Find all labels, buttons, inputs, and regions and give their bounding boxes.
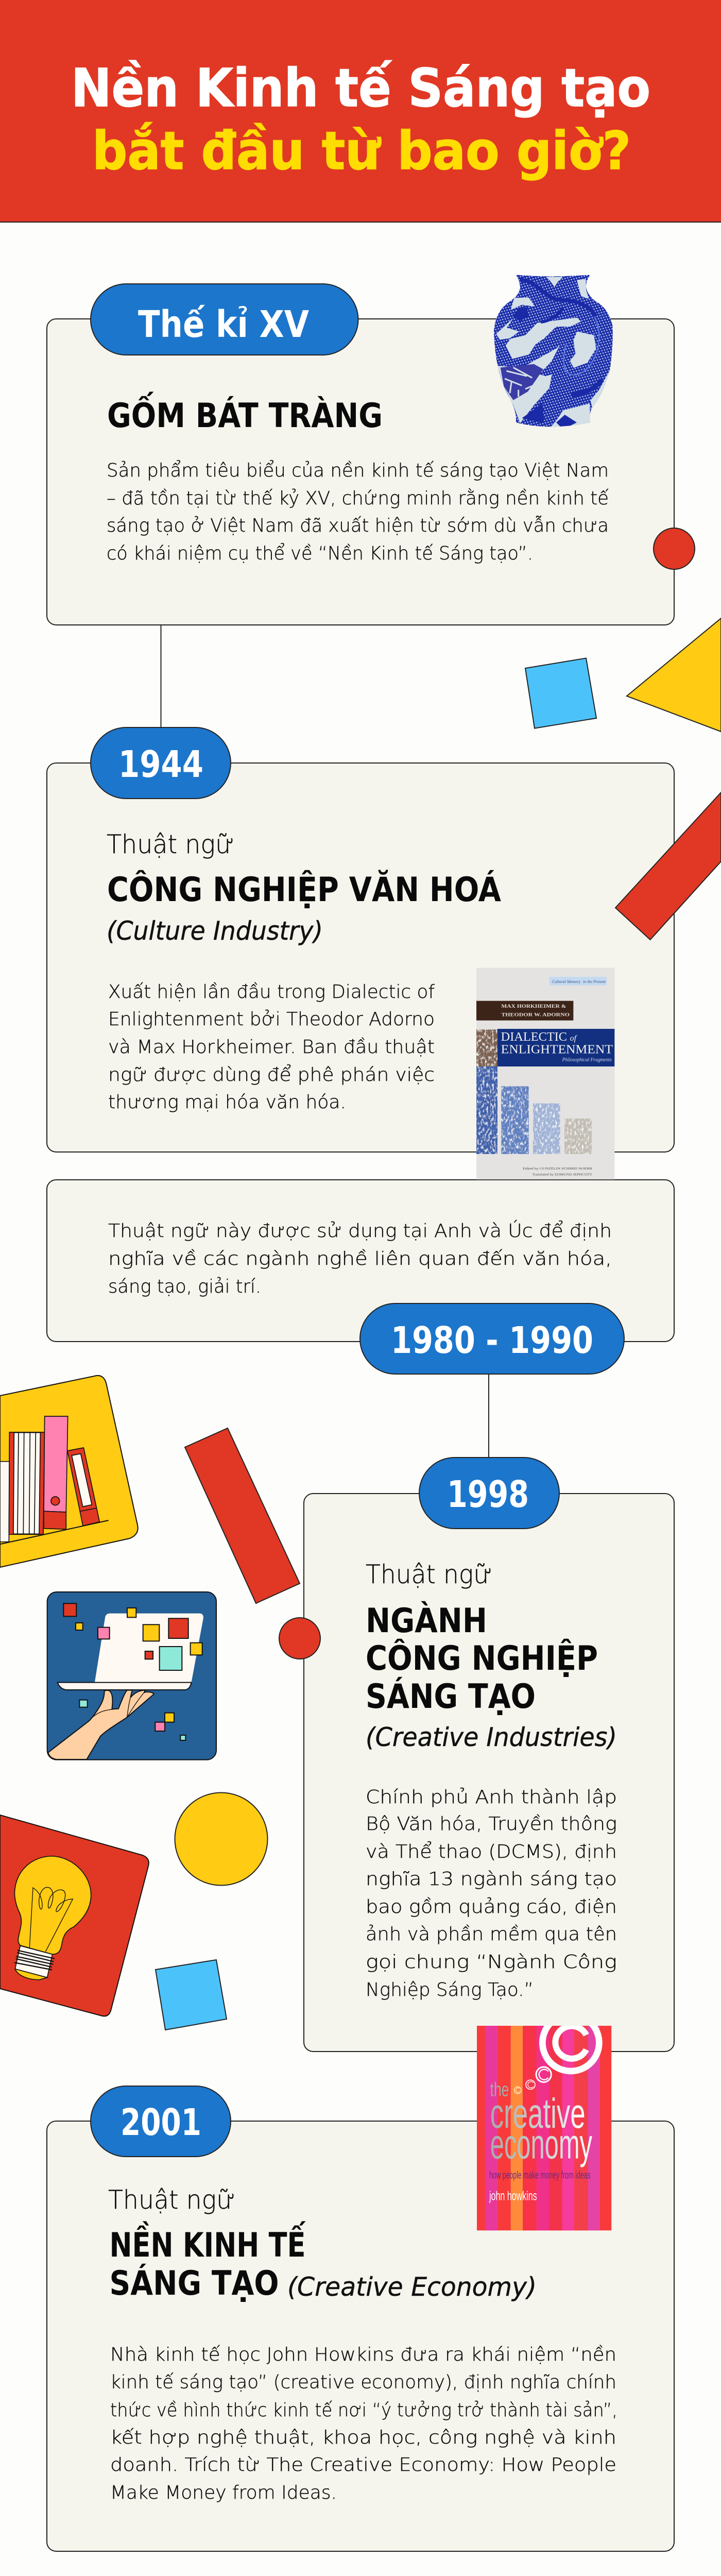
label: Thuật ngữ: Thuật ngữ: [366, 1560, 492, 1589]
date pill: Thế kỉ XV: Thế kỉ XV: [138, 303, 309, 346]
book cover: Dialectic of Enlightenment: in the Present: [583, 979, 606, 984]
book cover: The Creative Economy: how people make money from ideas: [489, 2169, 591, 2181]
body text: Creative Economy: thức về hình thức kinh tế nơi “ý tưởng trở thành tài sản”,: [110, 2400, 617, 2421]
body text: Culture Industry: thương mại hóa văn hóa.: [108, 1092, 346, 1113]
body text: Culture Industry: Enlightenment bởi Theodor Adorno: [108, 1009, 435, 1030]
book cover: The Creative Economy: creative: [490, 2090, 586, 2137]
book cover: Dialectic of Enlightenment: Philosophical Fragments: [562, 1057, 612, 1063]
body text: Gốm Bát Tràng: [107, 460, 609, 564]
illustration: red card with light bulb: [0, 1815, 149, 2016]
body text: Creative Industries: Bộ Văn hóa, Truyền thông: [366, 1814, 617, 1835]
heading: CÔNG NGHIỆP VĂN HOÁ: CÔNG NGHIỆP VĂN HOÁ: [107, 869, 501, 909]
illustration: yellow card with books: [0, 1376, 138, 1567]
body text: Gốm Bát Tràng: sáng tạo ở Việt Nam đã xuất hiện từ sớm dù vẫn chưa: [107, 515, 609, 536]
book cover: Dialectic of Enlightenment: [476, 968, 614, 1179]
book cover: Dialectic of Enlightenment: DIALECTIC: [501, 1030, 567, 1044]
date pill: 1980 - 1990: [360, 1303, 624, 1374]
body text: Gốm Bát Tràng: – đã tồn tại từ thế kỷ XV, chứng minh rằng nền kinh tế: [107, 488, 609, 509]
title line 2: bắt đầu từ bao giờ?: [92, 121, 631, 182]
body text: Culture Industry: Xuất hiện lần đầu trong Dialectic of: [108, 981, 435, 1003]
body text: Anh và Úc: sáng tạo, giải trí.: [108, 1276, 261, 1297]
body text: Creative Economy: [110, 2344, 617, 2503]
panel: 1998 Creative Industries: [304, 1458, 674, 2052]
body text: Anh và Úc: Thuật ngữ này được sử dụng tại Anh và Úc để định: [108, 1220, 612, 1242]
body text: Creative Industries: gọi chung “Ngành Công: [366, 1952, 617, 1973]
body text: Gốm Bát Tràng: Sản phẩm tiêu biểu của nền kinh tế sáng tạo Việt Nam: [107, 460, 609, 481]
body text: Creative Industries: nghĩa 13 ngành sáng tạo: [366, 1869, 617, 1890]
book cover: Dialectic of Enlightenment: ENLIGHTENMENT: [501, 1043, 613, 1057]
heading: NGÀNH CÔNG NGHIỆP SÁNG TẠO: [366, 1600, 598, 1716]
body text: Creative Industries: Nghiệp Sáng Tạo.”: [366, 1979, 534, 2001]
book cover: The Creative Economy: the: [490, 2078, 509, 2100]
body text: Anh và Úc: nghĩa về các ngành nghề liên quan đến văn hóa,: [108, 1248, 612, 1269]
decoration: yellow circle: [175, 1793, 268, 1886]
subheading: Culture Industry: (Culture Industry): [107, 916, 323, 946]
heading: GỐM BÁT TRÀNG: GỐM BÁT TRÀNG: [107, 391, 383, 435]
title line 1: Nền Kinh tế Sáng tạo: [71, 58, 650, 119]
body text: Creative Economy: Nhà kinh tế học John Howkins đưa ra khái niệm “nền: [110, 2344, 616, 2365]
book cover: Dialectic of Enlightenment: Translated by EDMUND JEPHCOTT: [532, 1173, 592, 1176]
book cover: The Creative Economy: [477, 2014, 611, 2230]
timeline connector: 1980-1990 to 1998: [488, 1374, 489, 1458]
illustration: hand holding laptop: [47, 1592, 216, 1760]
label: Thuật ngữ: Thuật ngữ: [108, 2185, 235, 2215]
date pill: 2001: [91, 2086, 231, 2157]
panel: 2001 Creative Economy: [47, 2086, 674, 2551]
decoration: yellow triangle: [627, 618, 721, 732]
body text: Creative Industries: ảnh và phần mềm qua tên: [366, 1924, 617, 1945]
decoration: red tilted rectangle: [185, 1428, 300, 1603]
book cover: The Creative Economy: economy: [490, 2121, 592, 2167]
label: Thuật ngữ: Thuật ngữ: [107, 829, 234, 859]
header banner: [0, 0, 721, 223]
panel: 1944 Culture Industry: [47, 727, 674, 1152]
heading: NGÀNH CÔNG NGHIỆP SÁNG TẠO: SÁNG TẠO: [366, 1676, 536, 1716]
book cover: Dialectic of Enlightenment: of: [570, 1034, 578, 1043]
heading: NỀN KINH TẾ SÁNG TẠO: SÁNG TẠO: [109, 2263, 279, 2303]
subheading: Creative Economy: (Creative Economy): [287, 2272, 537, 2302]
decoration: blue tilted square: [525, 658, 596, 728]
panel: Thế kỉ XV: [47, 272, 695, 625]
date pill: 1998: 1998: [447, 1473, 529, 1516]
body text: Culture Industry: ngữ được dùng để phê phán việc: [108, 1064, 435, 1086]
body text: Culture Industry: [108, 981, 435, 1113]
body text: Anh và Úc: [108, 1220, 612, 1297]
body text: Culture Industry: và Max Horkheimer. Ban đầu thuật: [108, 1037, 435, 1058]
subheading: Creative Industries: (Creative Industries): [366, 1722, 617, 1752]
book cover: Dialectic of Enlightenment: Edited by GUNZELIN SCHMID NOERR: [523, 1167, 593, 1171]
decoration: red diagonal bar: [615, 792, 721, 940]
icon: blue and white Bát Tràng vase: [494, 275, 613, 427]
body text: Gốm Bát Tràng: có khái niệm cụ thể về “Nền Kinh tế Sáng tạo”.: [107, 543, 533, 564]
book cover: Dialectic of Enlightenment: THEODOR W. ADORNO: [501, 1012, 570, 1018]
body text: Creative Economy: kinh tế sáng tạo” (creative economy), định nghĩa chính: [110, 2372, 616, 2393]
date pill: 2001: 2001: [121, 2101, 201, 2144]
heading: NỀN KINH TẾ SÁNG TẠO: [109, 2221, 306, 2303]
book cover: Dialectic of Enlightenment: MAX HORKHEIMER &: [501, 1004, 566, 1009]
book cover: The Creative Economy: john howkins: [489, 2189, 537, 2204]
heading: NỀN KINH TẾ SÁNG TẠO: NỀN KINH TẾ: [109, 2221, 306, 2265]
red circle marker: [279, 1618, 320, 1659]
body text: Creative Industries: bao gồm quảng cáo, điện: [366, 1896, 617, 1918]
heading: NGÀNH CÔNG NGHIỆP SÁNG TẠO: NGÀNH: [366, 1600, 487, 1640]
date pill: Thế kỉ XV: [91, 284, 358, 355]
date pill: 1980 - 1990: 1980 - 1990: [391, 1319, 593, 1362]
date pill: 1944: [91, 727, 231, 799]
book cover: Dialectic of Enlightenment: Cultural Memory: [552, 979, 581, 984]
body text: Creative Industries: Chính phủ Anh thành lập: [366, 1787, 617, 1808]
body text: Creative Economy: doanh. Trích từ The Creative Economy: How People: [110, 2454, 616, 2476]
red circle marker: [654, 528, 695, 569]
date pill: 1944: 1944: [118, 743, 203, 786]
heading: NGÀNH CÔNG NGHIỆP SÁNG TẠO: CÔNG NGHIỆP: [366, 1638, 598, 1678]
body text: Creative Economy: kết hợp nghệ thuật, khoa học, công nghệ và kinh: [110, 2427, 616, 2448]
timeline connector: XV to 1944: [161, 625, 162, 727]
body text: Creative Industries: và Thể thao (DCMS), định: [366, 1841, 617, 1862]
body text: Creative Industries: [366, 1787, 617, 2001]
decoration: blue tilted square lower: [156, 1960, 227, 2030]
panel: term use in UK and Australia: [47, 1180, 674, 1342]
date pill: 1998: [419, 1458, 559, 1529]
body text: Creative Economy: Make Money from Ideas.: [110, 2482, 337, 2503]
